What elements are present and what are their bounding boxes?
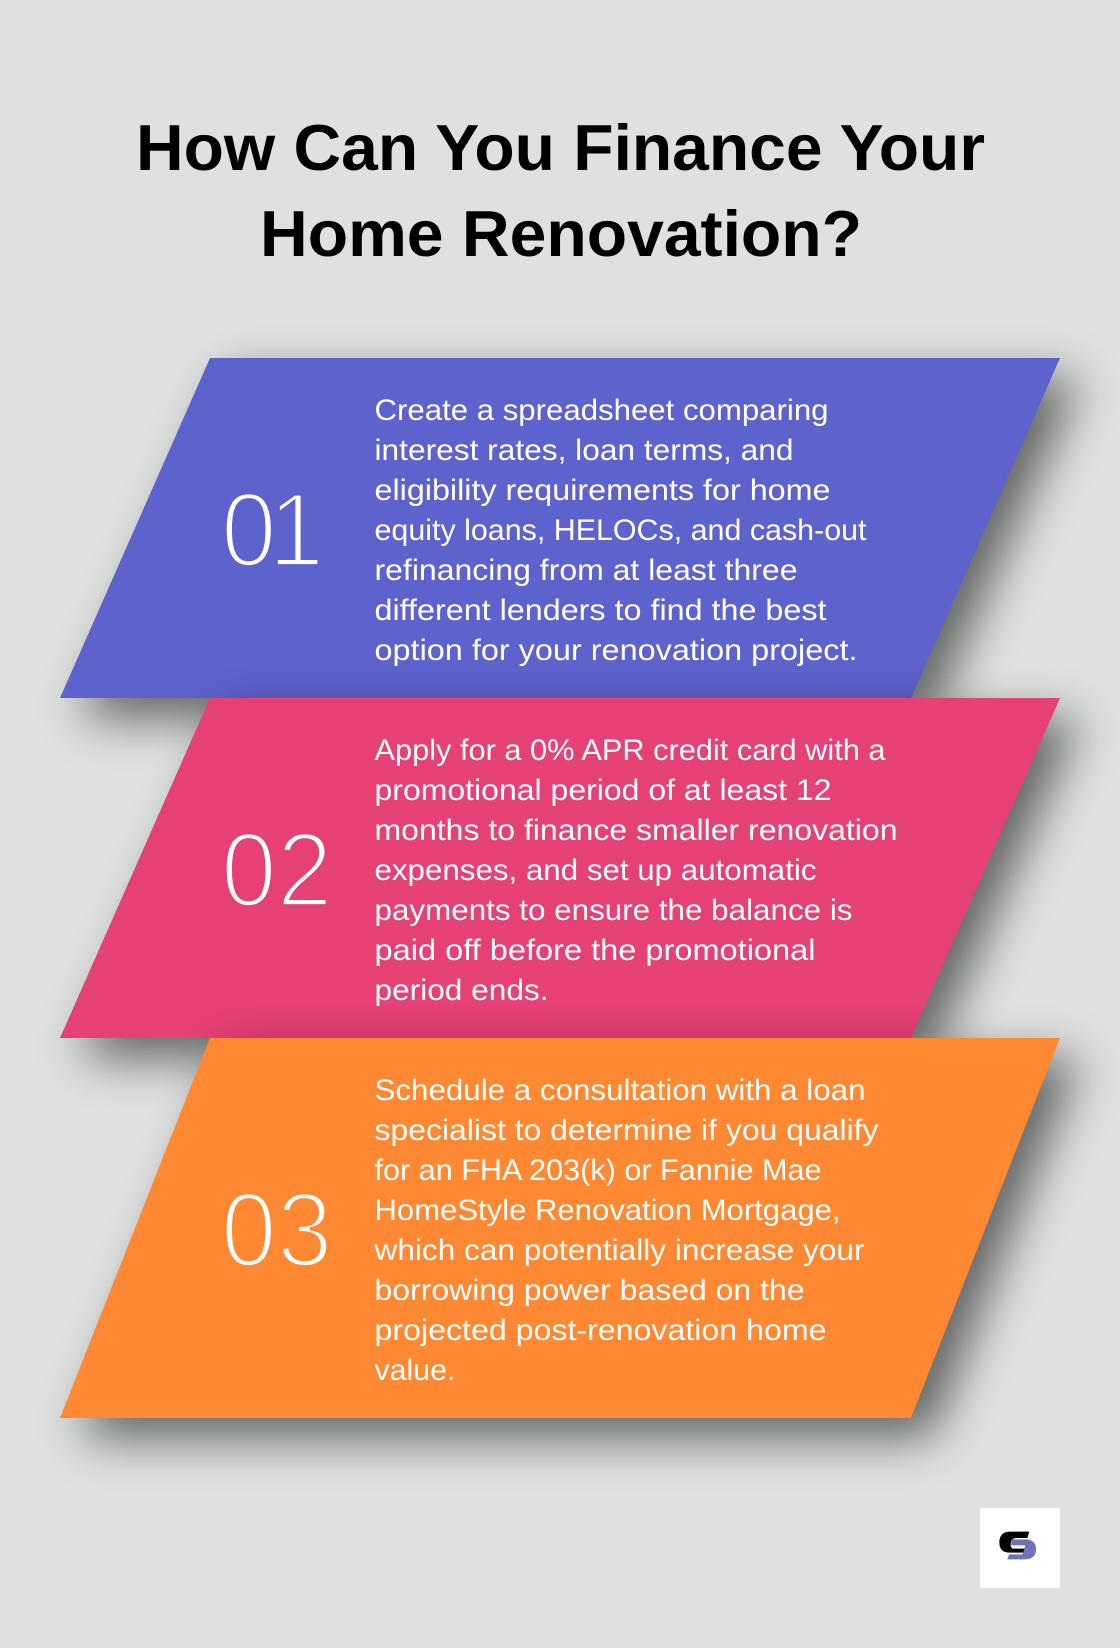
step 1 number: 01 <box>221 471 324 589</box>
step 2 number: 02 <box>221 811 333 929</box>
panel: step 2 <box>60 698 1060 1038</box>
step 3 number: 03 <box>221 1171 333 1289</box>
panel: step 3 <box>60 1038 1060 1418</box>
step 3 text <box>373 1074 878 1387</box>
step 2 text: payments to ensure the balance is <box>374 894 852 927</box>
step 3 text: Schedule a consultation with a loan <box>374 1074 866 1107</box>
step 1 text: refinancing from at least three <box>374 554 798 587</box>
step 1 text: equity loans, HELOCs, and cash-out <box>374 514 867 547</box>
step 2 text: paid off before the promotional <box>374 934 816 967</box>
step 3 text: HomeStyle Renovation Mortgage, <box>374 1194 840 1227</box>
icon: S logo mark <box>999 1532 1036 1559</box>
step 2 text: period ends. <box>374 974 548 1007</box>
step 1 background <box>60 358 1060 698</box>
title <box>136 111 985 270</box>
step 1 text: interest rates, loan terms, and <box>374 434 794 467</box>
step 2 text <box>374 734 898 1007</box>
title: Home Renovation? <box>260 197 862 270</box>
step 3 text: value. <box>374 1354 456 1387</box>
step 1 text: eligibility requirements for home <box>374 474 830 507</box>
step 2 text: promotional period of at least 12 <box>374 774 832 807</box>
step 3 text: which can potentially increase your <box>373 1234 865 1267</box>
step 3 text: specialist to determine if you qualify <box>374 1114 878 1147</box>
step 3 text: projected post-renovation home <box>374 1314 826 1347</box>
step 3 background <box>60 1038 1060 1418</box>
step 1 text: option for your renovation project. <box>374 634 858 667</box>
step 1 text: different lenders to find the best <box>374 594 827 627</box>
panel: step 1 <box>60 358 1060 698</box>
step 3 text: borrowing power based on the <box>374 1274 804 1307</box>
step 2 background <box>60 698 1060 1038</box>
step 1 text <box>374 394 867 667</box>
step 3 text: for an FHA 203(k) or Fannie Mae <box>374 1154 822 1187</box>
step 2 text: expenses, and set up automatic <box>374 854 816 887</box>
step 2 text: months to finance smaller renovation <box>374 814 898 847</box>
title: How Can You Finance Your <box>136 111 985 184</box>
logo badge <box>980 1508 1060 1588</box>
step 1 text: Create a spreadsheet comparing <box>374 394 828 427</box>
step 2 text: Apply for a 0% APR credit card with a <box>374 734 886 767</box>
